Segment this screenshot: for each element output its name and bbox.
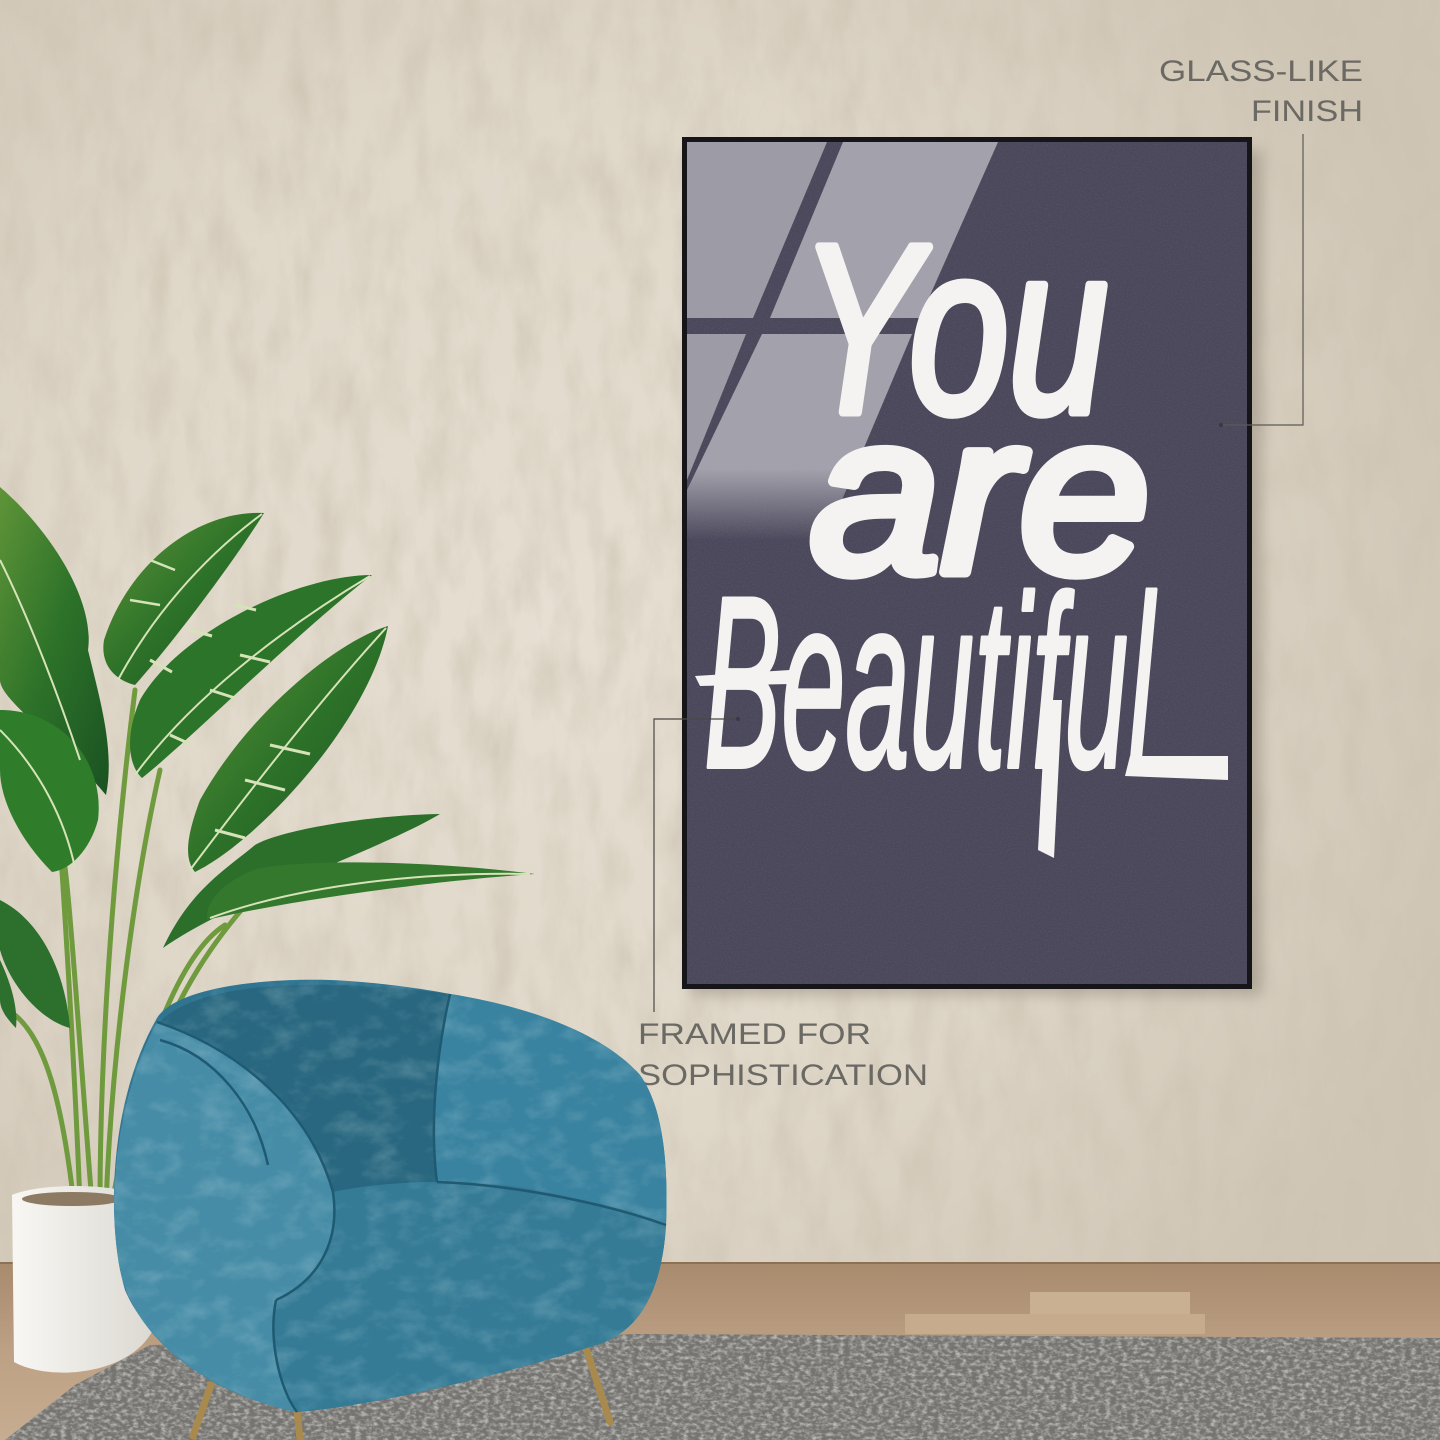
- callout: framed for sophistication: [638, 717, 928, 1092]
- back left panel: [157, 985, 450, 1192]
- leaf ribs and stripes: [0, 514, 530, 918]
- poster canvas: [687, 142, 1247, 984]
- chair legs: [193, 1345, 610, 1440]
- grey rug: [5, 1334, 1440, 1440]
- leaf: upper right: [130, 575, 372, 778]
- callout: glass-like finish: GLASS-LIKE: [1159, 55, 1363, 88]
- brush cross stroke: [695, 670, 790, 686]
- leaf: low left: [0, 900, 70, 1028]
- brush tail stroke: [1125, 756, 1228, 780]
- back right panel: [434, 994, 667, 1225]
- white pot: [12, 1186, 153, 1373]
- leaf: mid left: [0, 710, 99, 872]
- glass reflection: [687, 142, 998, 540]
- chair silhouette: [114, 980, 667, 1412]
- poster shadow: [690, 150, 1262, 995]
- canvas weave: [687, 142, 1247, 984]
- callout: glass-like finish: FINISH: [1251, 95, 1363, 128]
- callout: glass-like finish: [1159, 55, 1363, 427]
- blue armchair: [114, 980, 667, 1440]
- black frame: [682, 137, 1252, 989]
- leaf: top left large: [0, 487, 109, 795]
- callout: framed for sophistication: SOPHISTICATION: [638, 1059, 928, 1092]
- plant: [0, 487, 535, 1373]
- wooden floor: [0, 1262, 1440, 1440]
- chair seams: [157, 994, 666, 1412]
- leaf: upper centre: [103, 513, 264, 685]
- callout: framed for sophistication: FRAMED FOR: [638, 1018, 871, 1051]
- leaf: lower right long: [163, 814, 440, 948]
- plant stems: [15, 690, 250, 1204]
- lettering: You: You: [800, 195, 1108, 463]
- framed poster: [682, 137, 1262, 995]
- leaf: bottom stub: [0, 960, 16, 1028]
- lettering: are: are: [810, 367, 1150, 620]
- seat cushion: [273, 1182, 666, 1412]
- brush stem stroke: [1038, 700, 1062, 858]
- leaf: lowest long: [207, 862, 535, 920]
- leaf: centre right: [188, 626, 388, 872]
- left arm: [114, 1022, 334, 1412]
- hand lettering: [704, 195, 1157, 819]
- pot soil: [22, 1192, 122, 1206]
- velvet texture: [114, 980, 667, 1412]
